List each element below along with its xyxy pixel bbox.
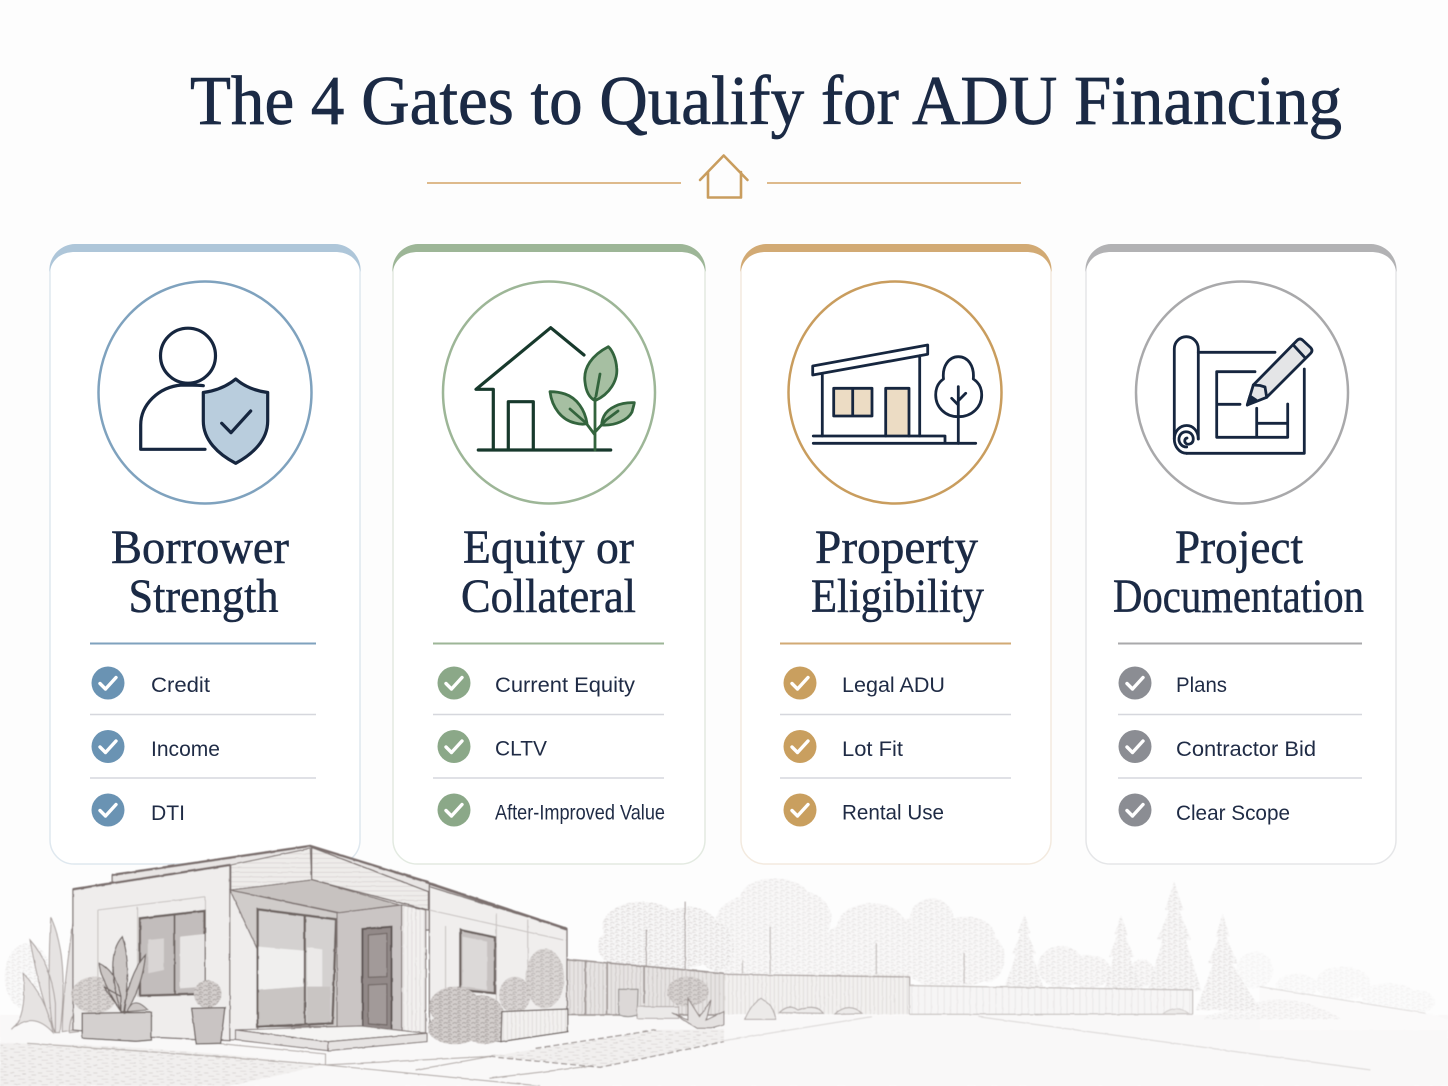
checklist [433, 644, 665, 826]
checklist [780, 644, 1011, 826]
landscape right [708, 878, 1448, 1070]
icon: ADU and tree [788, 282, 1002, 504]
checklist [1118, 644, 1362, 826]
fence shrubs [745, 998, 1189, 1019]
heading [111, 521, 289, 623]
entry steps [235, 1026, 427, 1051]
panel: project documentation [1086, 244, 1396, 864]
checklist: Plans [1176, 673, 1227, 697]
left plants behind house [5, 917, 78, 1033]
tree trunks [742, 927, 964, 983]
background trees and fence near house [567, 902, 734, 1028]
ground [0, 1015, 1448, 1086]
ground lines [724, 1017, 1370, 1070]
deciduous trees [708, 878, 1155, 988]
ADU house and foreground [0, 846, 734, 1086]
roof overhang [231, 847, 428, 913]
heading: Documentation [1113, 570, 1364, 623]
panel: property eligibility [740, 244, 1052, 864]
checklist [90, 644, 316, 826]
illustration: pencil sketch of ADU and landscape [0, 846, 1448, 1086]
entry recess [230, 890, 426, 1040]
checklist: CLTV [495, 736, 548, 760]
heading: Strength [128, 570, 278, 623]
checklist: Income [151, 737, 220, 761]
conifers [1005, 882, 1260, 1010]
left window [140, 911, 205, 996]
heading [1113, 521, 1364, 623]
checklist: Rental Use [842, 800, 944, 824]
icon: borrower with shield [98, 282, 312, 504]
right window [460, 930, 495, 993]
checklist: After-Improved Value [495, 800, 665, 824]
checklist: DTI [151, 801, 185, 825]
title divider with house icon [427, 156, 1021, 198]
distant hillside shrubs [1236, 952, 1435, 1013]
checklist: Credit [151, 673, 210, 697]
heading: Equity or [463, 521, 634, 574]
heading: Eligibility [811, 570, 984, 623]
panel: borrower strength [49, 244, 360, 864]
heading: Borrower [111, 521, 289, 574]
checklist: Lot Fit [842, 737, 903, 761]
heading [811, 521, 984, 623]
hillside and low shrubs [1204, 987, 1448, 1030]
planters and plants left [72, 937, 225, 1044]
checklist: Clear Scope [1176, 801, 1290, 825]
checklist: Contractor Bid [1176, 737, 1316, 761]
house walls [73, 846, 567, 1042]
icon: blueprint and pencil [1136, 282, 1348, 504]
heading [461, 521, 636, 623]
heading: Property [815, 521, 978, 574]
checklist: Current Equity [495, 673, 635, 697]
heading: Project [1175, 521, 1304, 574]
panel: equity or collateral [392, 244, 706, 864]
heading: Collateral [461, 570, 636, 623]
planters and plants right [428, 948, 568, 1044]
ground and paths [0, 1029, 724, 1086]
checklist: Legal ADU [842, 673, 945, 697]
icon: house with plant [443, 282, 655, 504]
title: The 4 Gates to Qualify for ADU Financing [190, 63, 1342, 140]
fence [724, 974, 1193, 1014]
